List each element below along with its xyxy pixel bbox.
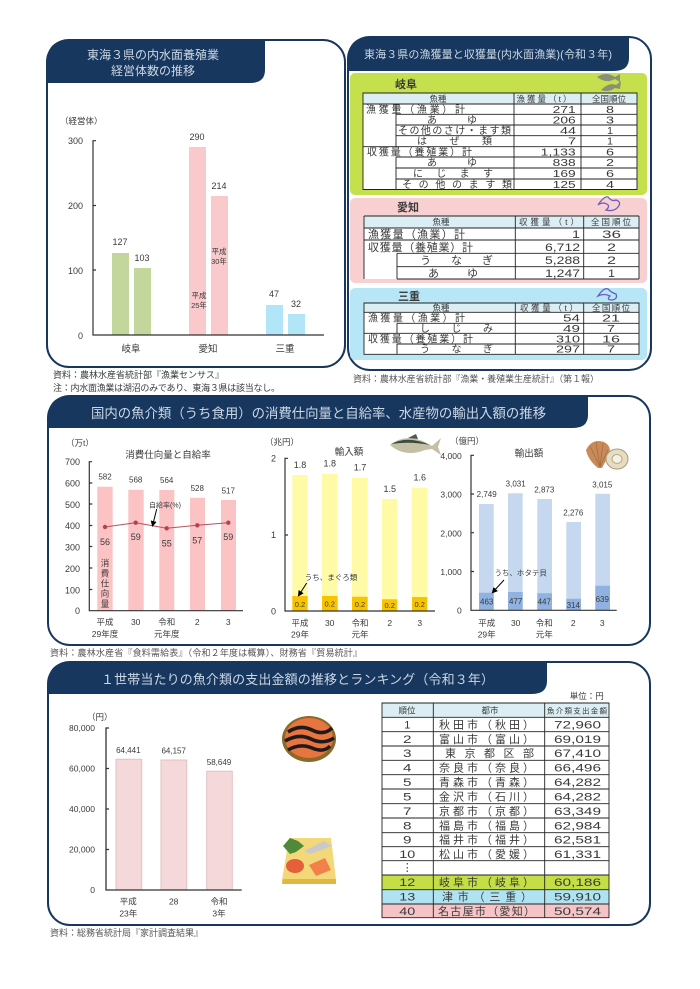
table: Aichi: 1 bbox=[572, 229, 580, 241]
table: Mie: しじみ bbox=[420, 323, 493, 335]
heading: catch and harvest: 東海３県の漁獲量と収獲量(内水面漁業)(令和３年) bbox=[364, 47, 612, 61]
chart: consumption and self-sufficiency bbox=[65, 438, 243, 639]
panel: Mie bbox=[350, 288, 647, 360]
table: Aichi: 漁獲量（漁業）計 bbox=[368, 227, 465, 241]
table: ranking: ⋮ bbox=[402, 862, 413, 874]
bar chart: management entities: 127 bbox=[112, 237, 128, 247]
chart: export value: 3 bbox=[600, 618, 605, 628]
table: ranking: 64,282 bbox=[554, 792, 601, 804]
table: Gifu: 収獲量（養殖業）計 bbox=[367, 146, 472, 158]
bar chart: spending per household: 64,441 bbox=[116, 746, 141, 755]
heading: management entities: 経営体数の推移 bbox=[111, 63, 195, 78]
chart: import value: 平成 bbox=[291, 618, 309, 628]
table: Gifu: 漁獲量（t） bbox=[516, 94, 572, 104]
table: Aichi: 1,247 bbox=[545, 268, 580, 280]
table: Gifu: 44 bbox=[560, 126, 577, 137]
chart: import value: 0.2 bbox=[295, 600, 305, 609]
chart: export value: うち、ホタテ貝 bbox=[494, 568, 547, 578]
table: ranking: 64,282 bbox=[554, 777, 601, 789]
table: Gifu: 6 bbox=[606, 169, 615, 180]
panel: management entities bbox=[47, 40, 345, 367]
chart: import value: 1.6 bbox=[413, 472, 426, 482]
chart: export value: 1,000 bbox=[440, 567, 462, 577]
bar chart: management entities: 290 bbox=[189, 132, 205, 142]
table: ranking: 61,331 bbox=[554, 849, 601, 861]
table: Gifu: 271 bbox=[553, 105, 576, 116]
bar chart: spending per household: 0 bbox=[90, 885, 95, 895]
icon: Mie map bbox=[598, 289, 616, 300]
bar chart: management entities: 103 bbox=[134, 253, 150, 263]
chart: export value: 平成 bbox=[478, 618, 496, 628]
table: ranking: 10 bbox=[399, 849, 415, 861]
chart: export value: 314 bbox=[567, 601, 581, 610]
table: ranking: 都市 bbox=[481, 706, 499, 716]
table: ranking: 62,581 bbox=[554, 834, 601, 846]
bar chart: management entities: 47 bbox=[269, 289, 279, 299]
panel: consumption and trade bbox=[48, 396, 650, 645]
chart: import value: 1 bbox=[271, 530, 276, 540]
chart: consumption and self-sufficiency: 100 bbox=[65, 586, 80, 596]
table: ranking: 福井市（福井） bbox=[439, 832, 534, 846]
bar chart: spending per household: 40,000 bbox=[69, 804, 95, 814]
table: ranking: 63,349 bbox=[554, 806, 601, 818]
table: Aichi: 魚種 bbox=[432, 217, 450, 227]
table: Gifu: あ ゆ bbox=[427, 157, 477, 169]
table: ranking: 魚介類支出金額 bbox=[547, 706, 608, 716]
table: Mie: 魚種 bbox=[432, 303, 450, 313]
chart: import value: 0 bbox=[271, 606, 276, 616]
heading: catch and harvest bbox=[348, 37, 629, 71]
table: Gifu: 2 bbox=[606, 158, 615, 169]
chart: export value: 29年 bbox=[478, 630, 496, 640]
chart: import value: 0.2 bbox=[324, 600, 335, 608]
chart: consumption and self-sufficiency: 582 bbox=[98, 472, 112, 482]
chart: export value: 30 bbox=[511, 618, 521, 628]
chart: consumption and self-sufficiency: 300 bbox=[65, 542, 80, 552]
chart: export value: 3,031 bbox=[506, 479, 526, 488]
chart: consumption and self-sufficiency: 29年度 bbox=[92, 629, 119, 639]
chart: export value: 4,000 bbox=[440, 451, 462, 461]
chart: export value: （億円） bbox=[450, 436, 484, 446]
table: ranking: 秋田市（秋田） bbox=[439, 718, 534, 732]
bar chart: spending per household: 23年 bbox=[119, 908, 138, 918]
table: Gifu: 1 bbox=[607, 126, 613, 137]
panel: Gifu: 岐阜 bbox=[395, 77, 417, 91]
chart: consumption and self-sufficiency: 57 bbox=[192, 536, 202, 546]
table: Aichi: 全国順位 bbox=[591, 217, 631, 227]
chart: consumption and self-sufficiency: 30 bbox=[131, 617, 141, 627]
bar chart: management entities: 0 bbox=[78, 331, 83, 341]
table: ranking: 順位 bbox=[398, 706, 416, 716]
chart: consumption and self-sufficiency: 2 bbox=[195, 617, 200, 627]
source note: panel 2: 資料：農林水産省統計部『漁業・養殖業生産統計』（第１報） bbox=[353, 373, 599, 384]
table: Gifu bbox=[363, 93, 637, 191]
table: Mie: 収獲量（養殖業）計 bbox=[368, 332, 473, 346]
bar chart: spending per household: 3年 bbox=[212, 908, 226, 918]
table: ranking: 5 bbox=[403, 777, 412, 789]
table: ranking: 9 bbox=[403, 834, 412, 846]
chart: import value: 1.7 bbox=[354, 462, 366, 472]
table: Aichi: 2 bbox=[607, 255, 616, 267]
bar chart: spending per household: 28 bbox=[169, 897, 179, 907]
table: Gifu: はぜ類 bbox=[417, 136, 492, 148]
bar chart: management entities: 岐阜 bbox=[121, 343, 141, 355]
heading: household spending bbox=[48, 662, 547, 694]
table: ranking bbox=[382, 691, 609, 918]
chart: consumption and self-sufficiency: 平成 bbox=[96, 617, 114, 627]
table: ranking: 13 bbox=[399, 892, 415, 904]
table: ranking: 2 bbox=[403, 734, 412, 746]
chart: consumption and self-sufficiency: 3 bbox=[226, 617, 231, 627]
chart: import value: うち、まぐろ類 bbox=[305, 572, 358, 582]
bar chart: management entities bbox=[60, 116, 324, 355]
chart: consumption and self-sufficiency: （万t） bbox=[66, 438, 94, 448]
table: Aichi: 収獲量（t） bbox=[519, 217, 579, 227]
table: ranking: 8 bbox=[403, 820, 412, 832]
bar chart: management entities: 平成 bbox=[212, 246, 227, 256]
bar chart: management entities: 愛知 bbox=[198, 343, 218, 355]
chart: consumption and self-sufficiency: 仕 bbox=[101, 578, 110, 588]
chart: import value: 1.5 bbox=[383, 484, 396, 494]
chart: import value: 0.2 bbox=[355, 600, 365, 609]
table: Aichi: 5,288 bbox=[545, 255, 580, 267]
bar chart: spending per household: （円） bbox=[87, 712, 113, 722]
chart: consumption and self-sufficiency: 元年度 bbox=[154, 629, 180, 639]
table: ranking: 69,019 bbox=[554, 734, 601, 746]
table: Gifu: その他のさけ・ます類 bbox=[398, 124, 511, 137]
table: ranking: 福島市（福島） bbox=[439, 818, 534, 832]
chart: import value: 0.2 bbox=[384, 601, 395, 610]
chart: export value: 2,873 bbox=[534, 486, 555, 495]
chart: import value: 1.8 bbox=[323, 458, 336, 468]
table: Mie: 7 bbox=[607, 324, 616, 335]
table: ranking: 12 bbox=[399, 877, 415, 889]
source note: panel 1 bbox=[53, 369, 280, 393]
table: ranking: 富山市（富山） bbox=[439, 733, 534, 746]
icon: Aichi map bbox=[598, 197, 620, 211]
chart: consumption and self-sufficiency: 500 bbox=[65, 500, 80, 510]
bar chart: spending per household: 平成 bbox=[120, 897, 137, 907]
panel: catch and harvest bbox=[348, 37, 651, 370]
table: Gifu: にじます bbox=[413, 168, 493, 180]
chart: import value: 0.2 bbox=[414, 600, 425, 609]
chart: consumption and self-sufficiency: 700 bbox=[65, 457, 80, 467]
chart: consumption and self-sufficiency: 令和 bbox=[158, 617, 175, 627]
chart: import value: 令和 bbox=[351, 618, 369, 628]
table: ranking: 4 bbox=[403, 762, 412, 774]
table: Mie: 漁獲量（漁業）計 bbox=[368, 312, 465, 324]
chart: export value: 447 bbox=[538, 598, 552, 606]
table: Mie: 49 bbox=[563, 324, 581, 335]
table: ranking: 59,910 bbox=[554, 892, 601, 904]
chart: consumption and self-sufficiency: 消 bbox=[101, 558, 109, 568]
table: Gifu: 4 bbox=[606, 180, 615, 191]
table: Mie: 21 bbox=[602, 314, 621, 324]
chart: export value: 2,276 bbox=[563, 509, 584, 518]
table: Mie: うなぎ bbox=[420, 342, 493, 356]
chart: consumption and self-sufficiency: 517 bbox=[222, 486, 236, 496]
table: Gifu: その他のます類 bbox=[402, 178, 512, 191]
chart: consumption and self-sufficiency: 量 bbox=[101, 599, 110, 609]
chart: export value: 3,000 bbox=[440, 490, 462, 500]
chart: export value: 463 bbox=[480, 598, 494, 606]
table: Gifu: 8 bbox=[606, 105, 615, 116]
table: ranking: 名古屋市（愛知） bbox=[438, 904, 535, 918]
bar chart: spending per household: 64,157 bbox=[161, 747, 186, 756]
chart: export value: 令和 bbox=[536, 618, 553, 628]
source note: panel 4: 資料：総務省統計局『家計調査結果』 bbox=[50, 927, 203, 938]
bar chart: spending per household: 20,000 bbox=[69, 844, 95, 854]
heading: consumption and trade: 国内の魚介類（うち食用）の消費仕向量と自給率、水産物の輸出入額の推移 bbox=[91, 406, 546, 421]
chart: consumption and self-sufficiency: 0 bbox=[75, 606, 80, 616]
chart: import value: 1.8 bbox=[294, 460, 306, 470]
table: Gifu: 全国順位 bbox=[592, 94, 626, 104]
table: Aichi: 36 bbox=[602, 229, 621, 241]
table: Gifu: 6 bbox=[606, 148, 615, 158]
chart: consumption and self-sufficiency: 200 bbox=[65, 564, 80, 574]
chart: export value: 477 bbox=[509, 597, 523, 606]
chart: export value: 2,749 bbox=[477, 490, 497, 499]
bar chart: management entities: 平成 bbox=[192, 290, 207, 300]
table: Aichi bbox=[364, 216, 639, 280]
heading: household spending: １世帯当たりの魚介類の支出金額の推移とランキング（令和３年） bbox=[101, 672, 494, 687]
bar chart: management entities: 214 bbox=[211, 181, 227, 191]
chart: consumption and self-sufficiency: 59 bbox=[223, 532, 233, 542]
bar chart: management entities: 100 bbox=[68, 266, 83, 276]
chart: import value: 3 bbox=[417, 618, 422, 628]
table: Gifu: 1,133 bbox=[541, 148, 576, 158]
icon: tuna bbox=[390, 434, 441, 455]
table: Mie: 全国順位 bbox=[592, 303, 630, 313]
chart: import value: 2 bbox=[271, 454, 276, 464]
chart: export value: 2 bbox=[571, 618, 576, 628]
table: ranking: 62,984 bbox=[554, 820, 601, 832]
icon: shells bbox=[586, 441, 628, 469]
bar chart: management entities: 三重 bbox=[275, 343, 295, 355]
table: ranking: 金沢市（石川） bbox=[439, 790, 534, 804]
table: ranking: 松山市（愛媛） bbox=[439, 847, 534, 861]
chart: export value: 639 bbox=[596, 595, 610, 604]
heading: consumption and trade bbox=[48, 396, 588, 428]
chart: consumption and self-sufficiency: 564 bbox=[160, 476, 174, 485]
table: ranking: 5 bbox=[403, 792, 412, 804]
panel: Aichi bbox=[350, 197, 647, 283]
table: Gifu: 魚種 bbox=[429, 94, 447, 104]
source note: panel 3: 資料：農林水産省『食料需給表』（令和２年度は概算）、財務省『貿易統計』 bbox=[50, 647, 362, 658]
chart: consumption and self-sufficiency: 59 bbox=[131, 532, 141, 542]
bar chart: management entities: 300 bbox=[68, 136, 83, 146]
bar chart: management entities: 25年 bbox=[191, 300, 207, 310]
heading: management entities: 東海３県の内水面養殖業 bbox=[87, 47, 219, 62]
table: Aichi: あ ゆ bbox=[428, 267, 478, 280]
table: ranking: 青森市（青森） bbox=[439, 775, 534, 789]
bar chart: management entities: 200 bbox=[68, 201, 83, 211]
table: Gifu: あ ゆ bbox=[427, 114, 477, 126]
chart: consumption and self-sufficiency: 費 bbox=[101, 568, 110, 578]
chart: import value: 輸入額 bbox=[335, 446, 364, 458]
chart: consumption and self-sufficiency: 56 bbox=[100, 537, 110, 547]
table: Aichi: うなぎ bbox=[420, 253, 493, 267]
chart: consumption and self-sufficiency: 向 bbox=[101, 588, 109, 598]
table: ranking: 1 bbox=[404, 720, 410, 732]
table: Mie bbox=[364, 303, 639, 356]
bar chart: management entities: 32 bbox=[291, 299, 301, 309]
panel: Gifu bbox=[350, 73, 647, 195]
table: Mie: 310 bbox=[556, 334, 581, 346]
icon: sashimi board bbox=[282, 838, 336, 884]
chart: import value: 30 bbox=[325, 618, 335, 628]
table: Aichi: 2 bbox=[607, 242, 616, 254]
table: Aichi: 1 bbox=[608, 268, 615, 280]
chart: consumption and self-sufficiency: 528 bbox=[191, 484, 205, 493]
table: Gifu: 3 bbox=[606, 116, 615, 126]
bar chart: spending per household: 令和 bbox=[210, 897, 228, 907]
bar chart: spending per household: 60,000 bbox=[69, 764, 95, 774]
chart: export value: 2,000 bbox=[440, 528, 462, 538]
table: ranking: 岐阜市（岐阜） bbox=[439, 876, 534, 889]
chart: consumption and self-sufficiency: 568 bbox=[129, 476, 143, 484]
chart: export value: 輸出額 bbox=[515, 448, 544, 460]
table: ranking: 7 bbox=[403, 806, 412, 818]
chart: consumption and self-sufficiency: 600 bbox=[65, 478, 80, 488]
table: Gifu: 838 bbox=[553, 158, 576, 169]
table: ranking: 奈良市（奈良） bbox=[439, 760, 534, 774]
source note: panel 1: 資料：農林水産省統計部『漁業センサス』 bbox=[53, 369, 224, 380]
table: ranking: 50,574 bbox=[554, 906, 601, 918]
table: ranking: 津市（三重） bbox=[442, 890, 532, 904]
table: Mie: 16 bbox=[602, 334, 621, 346]
bar chart: spending per household: 58,649 bbox=[207, 758, 232, 767]
chart: export value bbox=[440, 436, 628, 640]
table: ranking: 3 bbox=[403, 748, 412, 760]
table: Aichi: 6,712 bbox=[545, 242, 580, 254]
table: ranking: 67,410 bbox=[554, 748, 601, 760]
chart: consumption and self-sufficiency: 55 bbox=[162, 538, 172, 548]
icon: grilled salmon plate bbox=[282, 716, 336, 762]
table: Gifu: 1 bbox=[607, 136, 613, 148]
icon: fish bbox=[597, 74, 621, 91]
table: ranking: 東京都区部 bbox=[445, 747, 534, 760]
bar chart: spending per household: 80,000 bbox=[69, 723, 95, 733]
table: Mie: 54 bbox=[563, 314, 581, 324]
table: Aichi: 収獲量（養殖業）計 bbox=[368, 240, 473, 254]
table: ranking: 60,186 bbox=[554, 877, 601, 889]
table: Gifu: 漁獲量（漁業）計 bbox=[366, 103, 465, 116]
chart: import value: 2 bbox=[387, 618, 392, 628]
table: Gifu: 206 bbox=[553, 116, 576, 126]
bar chart: management entities: 30年 bbox=[211, 256, 227, 266]
source note: panel 1: 注：内水面漁業は湖沼のみであり、東海３県は該当なし。 bbox=[53, 382, 280, 393]
panel: Aichi: 愛知 bbox=[397, 200, 419, 214]
bar chart: management entities: （経営体） bbox=[60, 116, 103, 126]
table: Mie: 297 bbox=[556, 344, 581, 356]
panel: Mie: 三重 bbox=[398, 289, 420, 303]
chart: export value: 3,015 bbox=[592, 480, 613, 489]
table: Mie: 7 bbox=[607, 344, 616, 356]
chart: import value: 元年 bbox=[351, 630, 369, 640]
table: ranking: 72,960 bbox=[554, 720, 601, 732]
table: Gifu: 169 bbox=[553, 169, 576, 180]
chart: consumption and self-sufficiency: 消費仕向量と自給率 bbox=[125, 449, 211, 461]
table: ranking: 40 bbox=[399, 906, 415, 918]
table: ranking: 京都市（京都） bbox=[439, 805, 534, 818]
bar chart: spending per household bbox=[69, 712, 242, 918]
chart: import value: （兆円） bbox=[265, 437, 299, 447]
table: Gifu: 7 bbox=[568, 136, 577, 148]
chart: consumption and self-sufficiency: 自給率(%) bbox=[149, 500, 181, 510]
chart: import value bbox=[265, 434, 441, 640]
heading: management entities bbox=[47, 40, 265, 83]
chart: export value: 0 bbox=[457, 606, 462, 616]
table: Mie: 収獲量（t） bbox=[520, 303, 578, 313]
table: Gifu: 125 bbox=[553, 180, 576, 191]
chart: import value: 29年 bbox=[291, 630, 309, 640]
table: ranking: 単位：円 bbox=[570, 691, 604, 701]
panel: household spending bbox=[48, 662, 650, 925]
table: ranking: 66,496 bbox=[554, 762, 601, 774]
chart: export value: 元年 bbox=[536, 630, 553, 640]
chart: consumption and self-sufficiency: 400 bbox=[65, 521, 80, 531]
